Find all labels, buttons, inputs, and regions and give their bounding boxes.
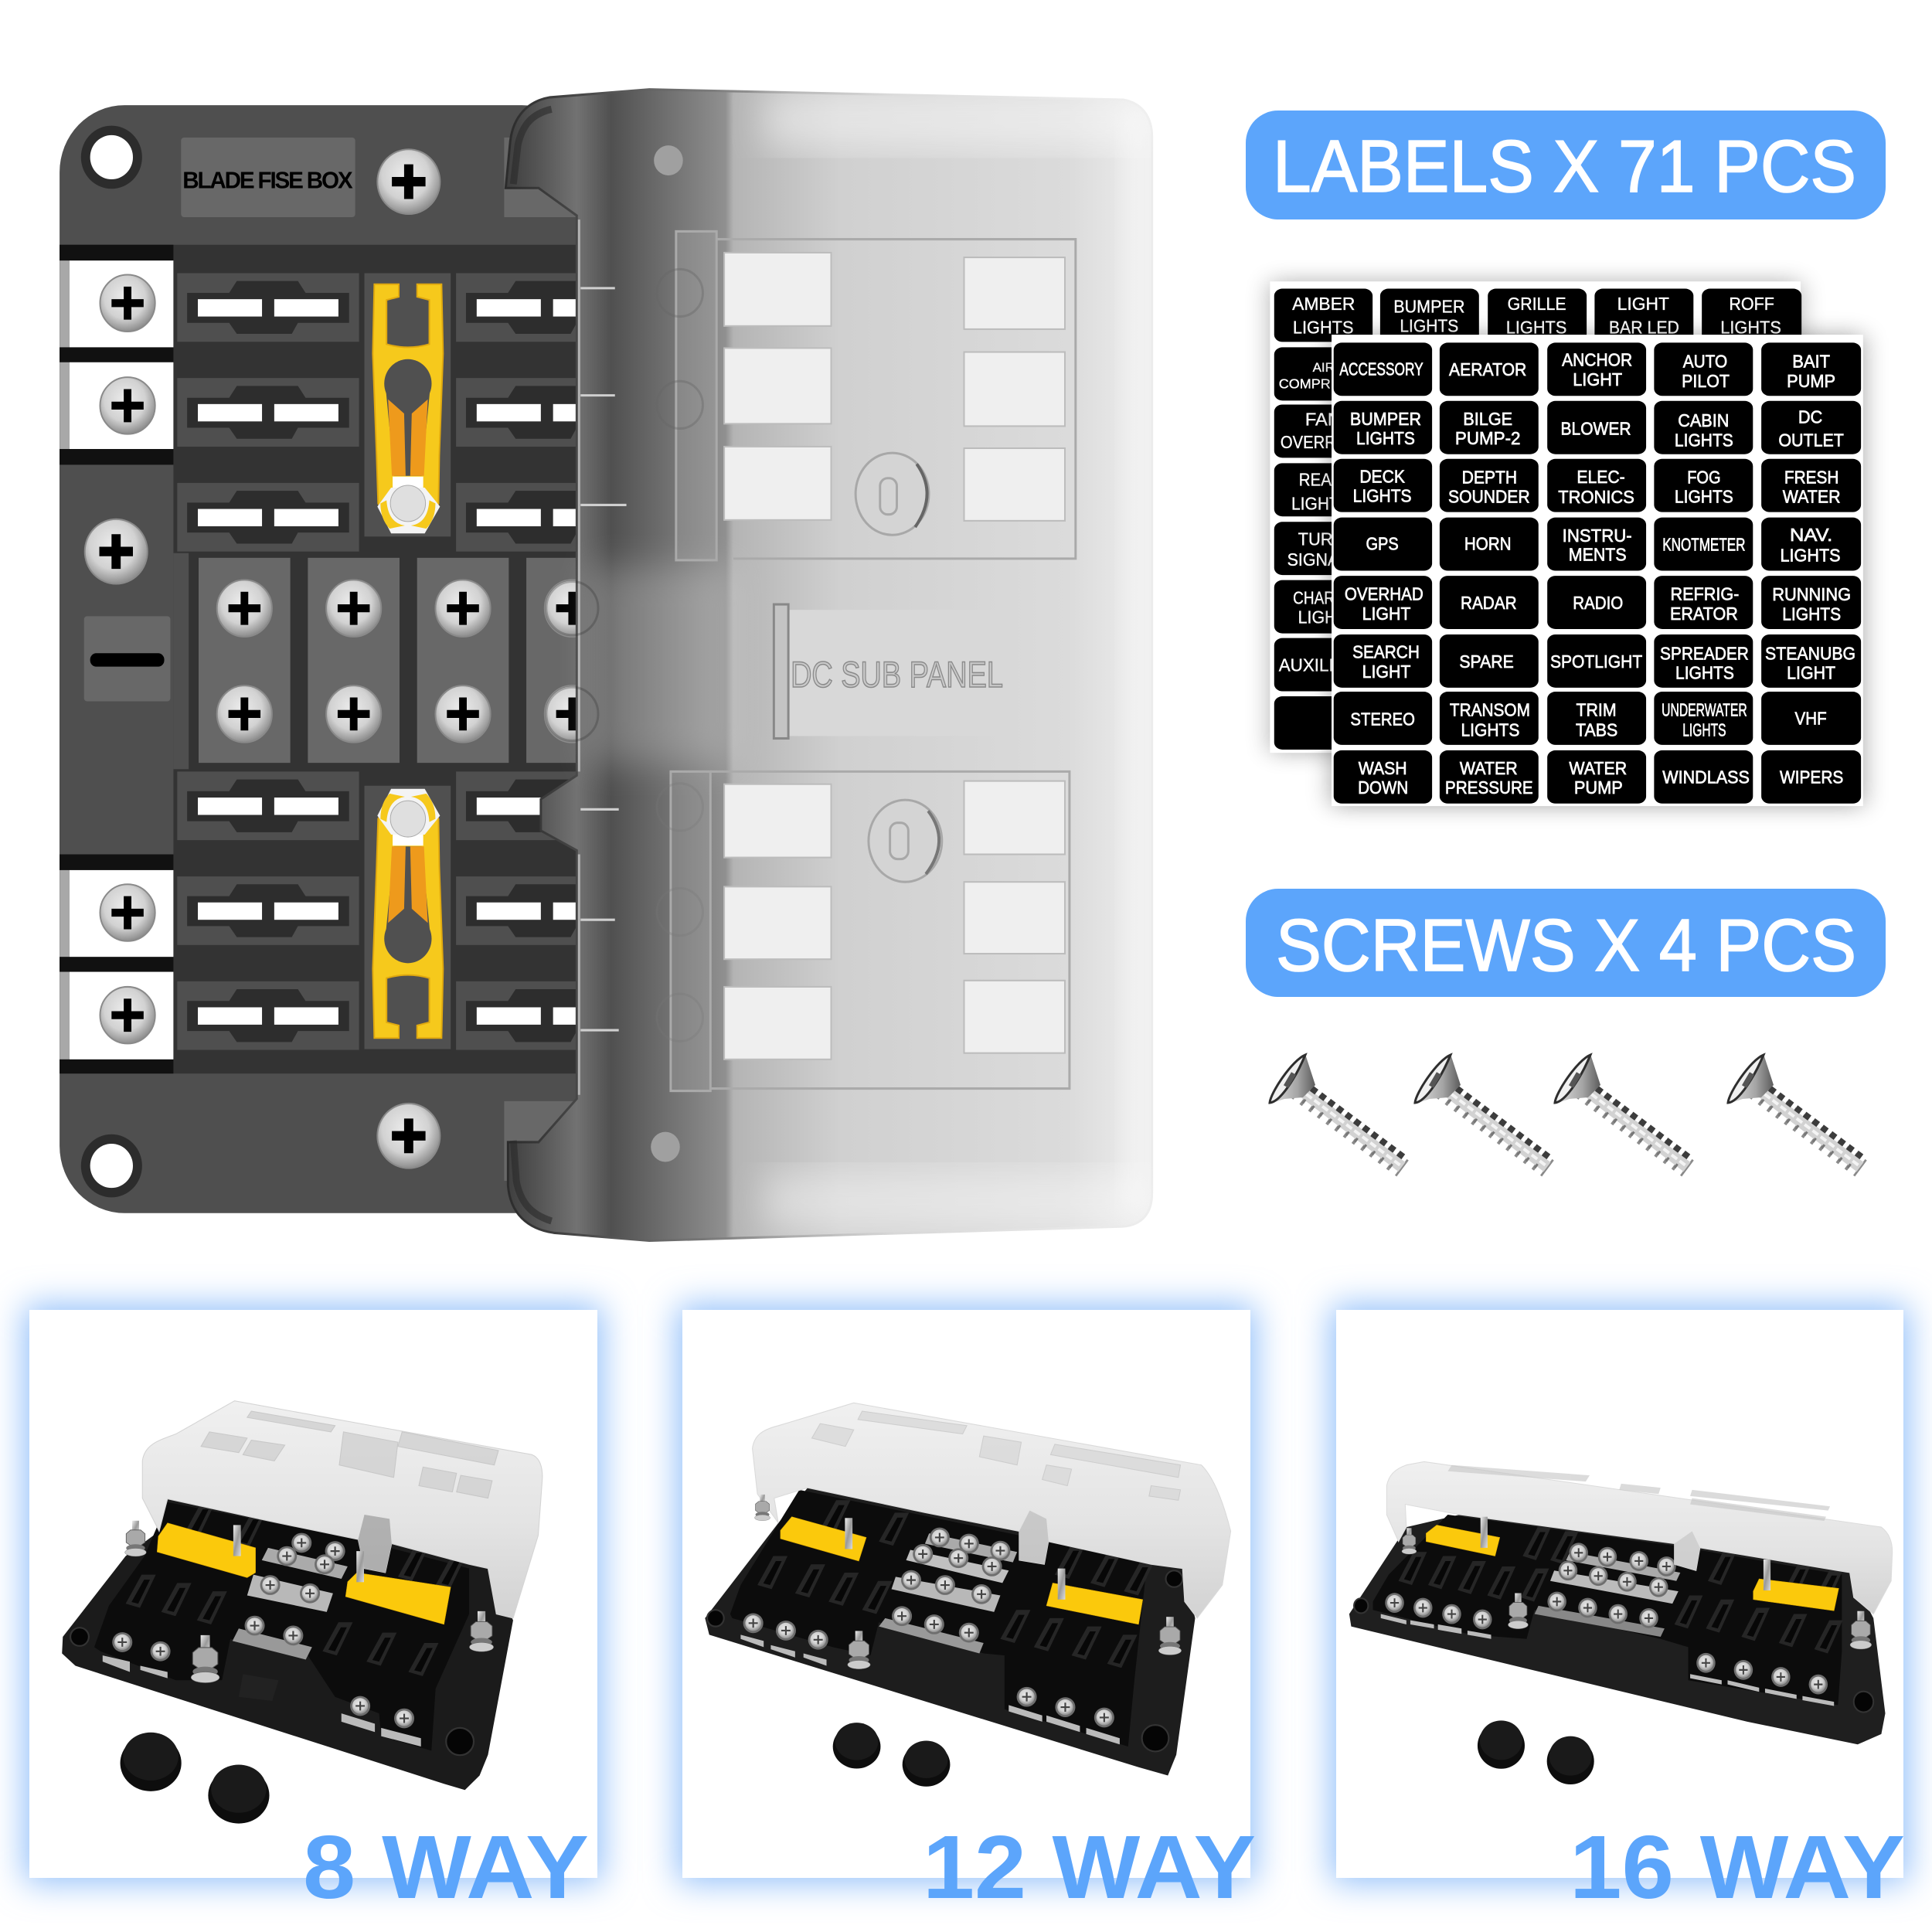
label plate: blade fuse box [181,138,355,217]
front label sheet: LIGHT [1787,663,1835,683]
card: 12 way [678,1305,1256,1917]
front label sheet: KNOTMETER [1662,535,1746,555]
front label sheet: REFRIG- [1671,584,1739,604]
front label sheet: STEREO [1350,709,1415,730]
front label sheet [1332,335,1863,806]
front label sheet: AERATOR [1449,360,1526,380]
front label sheet: BAIT [1792,352,1830,372]
front label sheet: LIGHT [1573,370,1622,390]
back label sheet: TURN [1298,529,1345,549]
front label sheet: AUTO [1683,352,1727,372]
front label sheet: DOWN [1358,778,1408,798]
front label sheet: PUMP-2 [1455,429,1520,449]
cover windows [1447,1465,1830,1521]
front label sheet: WATER [1569,759,1627,779]
front label sheet: GPS [1366,534,1399,554]
card: 16 way [1332,1305,1908,1917]
back label sheet: LIGHTS [1291,494,1350,514]
label windows [724,253,1065,1060]
icon: top screw [377,149,440,214]
back label sheet: AIR [1313,360,1335,375]
front label sheet: TRONICS [1558,488,1634,508]
front label sheet: TABS [1576,720,1617,740]
heading: 12 way: 12 WAY [923,1817,1256,1917]
front label sheet: ELEC- [1577,468,1625,487]
front label sheet: SOUNDER [1448,487,1530,507]
heading: 16 way: 16 WAY [1570,1817,1905,1917]
badge: screws x 4 pcs: SCREWS X 4 PCS [1276,904,1856,987]
front label sheet: ANCHOR [1562,350,1632,370]
cover label: DC SUB PANEL [774,604,1016,739]
back label sheet: REAR [1299,470,1343,490]
back label sheet: BUMPER [1393,297,1464,317]
card: 8 way [25,1305,602,1917]
front label sheet: DEPTH [1462,468,1517,488]
front label sheet: TRIM [1577,700,1617,720]
front label sheet: SPARE [1459,652,1514,672]
icon: screw 1 [1270,1054,1406,1170]
product photo: 12 way fuse box [705,1403,1231,1787]
front label sheet: LIGHTS [1782,604,1841,624]
front label sheet: WIPERS [1780,767,1843,787]
front label sheet: PRESSURE [1445,778,1533,798]
front label sheet: LIGHTS [1675,487,1733,507]
front label sheet: UNDERWATER [1662,700,1747,720]
upper window frame [657,231,1076,560]
negative terminal block [60,464,189,855]
front label sheet: LIGHTS [1461,720,1519,740]
front label sheet: LIGHTS [1682,720,1726,740]
back label sheet: BAR LED [1609,318,1679,338]
front label sheet: HORN [1464,534,1512,554]
front label sheet: NAV. [1790,526,1832,545]
front label sheet: BUMPER [1350,410,1421,430]
cover windows [812,1411,1181,1500]
product photo: 8 way fuse box [62,1401,543,1824]
front label sheet: LIGHTS [1353,486,1412,506]
front label sheet: VHF [1794,709,1827,729]
front label sheet: BILGE [1463,410,1512,430]
back label sheet: ROFF [1729,294,1774,315]
front label sheet: DC [1798,407,1822,427]
label plate: blade fuse box: BLADE FISE BOX [182,168,353,193]
front label sheet: LIGHT [1362,662,1410,682]
front label sheet: BLOWER [1561,419,1631,439]
output terminals upper [60,245,173,464]
front label sheet: INSTRU- [1563,526,1632,546]
front label sheet: ERATOR [1670,604,1738,624]
front label sheet: ACCESSORY [1339,359,1423,379]
heading: 8 way: 8 WAY [303,1817,589,1917]
front label sheet: SPREADER [1660,644,1749,664]
front label sheet: SEARCH [1352,642,1420,662]
front label sheet: LIGHTS [1356,429,1415,449]
icon: yellow fuse puller top [365,273,451,536]
back label sheet: CHART [1293,588,1343,608]
front label sheet: WINDLASS [1662,767,1750,787]
icon: knob upper [855,453,929,535]
front label sheet: PILOT [1682,372,1730,392]
front label sheet: LIGHTS [1781,546,1841,566]
back label sheet: COMPRESSOR [1279,377,1379,392]
icon: screw 4 [1728,1054,1865,1170]
back label sheet: AUXILIARY [1279,655,1369,675]
negative bus bars [199,558,600,763]
front label sheet: RUNNING [1772,585,1851,605]
back label sheet: FAN [1305,410,1341,430]
icon: bottom screw [377,1104,440,1168]
front label sheet: RADIO [1573,594,1623,613]
fuse box with transparent cover [60,90,1152,1240]
product photo: 16 way fuse box [1349,1461,1893,1784]
label sheets [1270,281,1863,806]
panel: fuse box base [60,105,638,1213]
front label sheet: RADAR [1461,594,1517,613]
front label sheet: PUMP [1574,778,1623,798]
back label sheet: SIGNAL [1287,550,1348,570]
front label sheet: DECK [1359,467,1405,487]
back label sheet: LIGHTS [1506,318,1566,338]
front label sheet: TRANSOM [1450,700,1530,720]
front label sheet: WATER [1783,487,1841,507]
back label sheet: LIGHTS [1720,318,1781,338]
front label sheet: LIGHTS [1675,430,1733,451]
lower window frame [657,771,1070,1091]
icon: mounting hole top [81,126,142,189]
icon: yellow fuse puller bottom [365,786,451,1049]
back label sheet: LIGHT [1298,607,1347,628]
back label sheet: LIGHTS [1293,318,1353,338]
output terminals lower [60,855,173,1073]
icon: knob lower [869,800,942,882]
back label sheet: GRILLE [1508,294,1566,315]
back label sheet [1270,281,1801,753]
back label sheet: OVERRIDE [1281,433,1362,453]
front label sheet: STEANUBG [1765,644,1855,664]
front label sheet: FRESH [1784,468,1838,488]
cover windows [201,1411,498,1498]
front label sheet: CABIN [1678,411,1729,430]
front label sheet: PUMP [1787,372,1835,392]
front label sheet: FOG [1687,468,1721,488]
front label sheet: SPOTLIGHT [1550,652,1642,672]
front label sheet: LIGHTS [1675,663,1734,683]
fuse holders [177,273,638,1050]
front label sheet: WASH [1359,759,1407,779]
front label sheet: OVERHAD [1345,584,1423,604]
icon: mounting hole bottom [81,1134,142,1197]
front label sheet: WATER [1460,759,1518,779]
panel: transparent cover [505,90,1152,1240]
back label sheet: LIGHTS [1400,316,1458,336]
front label sheet: OUTLET [1778,430,1844,451]
icon: screw 2 [1415,1054,1552,1170]
back label sheet: LIGHT [1617,294,1669,315]
badge: labels x 71 pcs: LABELS X 71 PCS [1273,125,1856,208]
icon: screw 3 [1555,1054,1692,1170]
front label sheet: MENTS [1569,545,1627,565]
back label sheet: AMBER [1292,294,1355,315]
front label sheet: LIGHT [1362,604,1410,624]
cover label: DC SUB PANEL: DC SUB PANEL [791,655,1003,695]
